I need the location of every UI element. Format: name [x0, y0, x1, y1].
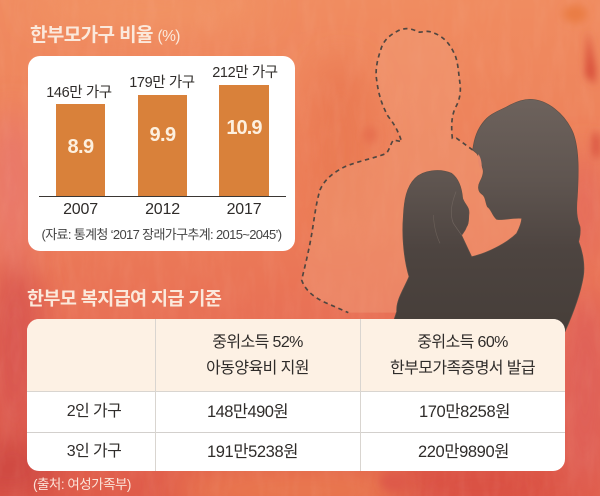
- table source: (출처: 여성가족부): [33, 477, 131, 492]
- row divider 1: [27, 391, 565, 392]
- mother and child silhouette: [390, 99, 584, 332]
- header: 52%: 아동양육비 지원: [206, 360, 309, 377]
- value: 10.9: 10.9: [226, 117, 262, 139]
- chart source: (자료: 통계청 ‘2017 장래가구추계: 2015~2045’): [42, 227, 281, 242]
- header: 60%: 한부모가족증명서 발급: [390, 360, 535, 377]
- year: 2007: 2007: [63, 201, 98, 218]
- row label: 3 persons: 3인 가구: [67, 443, 121, 460]
- axis line: [39, 196, 286, 197]
- row label: 2 persons: 2인 가구: [67, 403, 121, 420]
- value: 2 persons 52%: 148만490원: [207, 403, 288, 421]
- column divider 1: [155, 319, 156, 471]
- outline of absent parent: [302, 29, 584, 332]
- value: 2 persons 60%: 170만8258원: [419, 403, 510, 421]
- bar: 2012: [138, 95, 187, 196]
- value: 3 persons 52%: 191만5238원: [207, 443, 298, 461]
- value: 9.9: 9.9: [149, 124, 176, 146]
- title: single-parent household ratio: 한부모가구 비율 (%): [30, 25, 180, 46]
- value: 3 persons 60%: 220만9890원: [418, 443, 509, 461]
- header: 52%: [206, 334, 309, 377]
- header: 52%: 중위소득 52%: [212, 334, 303, 351]
- label: 2012 households: 179만 가구: [129, 75, 195, 91]
- year: 2017: 2017: [227, 201, 261, 218]
- header: 60%: 중위소득 60%: [417, 334, 508, 351]
- label: 2007 households: 146만 가구: [46, 85, 112, 101]
- panel: bar chart: [28, 56, 295, 251]
- header: 60%: [390, 334, 535, 377]
- year: 2012: 2012: [145, 201, 180, 218]
- heading: welfare benefit criteria: 한부모 복지급여 지급 기준: [27, 288, 221, 309]
- column divider 2: [360, 319, 361, 471]
- label: 2017 households: 212만 가구: [212, 65, 278, 81]
- row divider 2: [27, 432, 565, 433]
- bar: 2007: [56, 104, 105, 196]
- value: 8.9: 8.9: [67, 136, 94, 158]
- bar: 2017: [219, 85, 269, 196]
- table header background: [27, 319, 565, 391]
- table: benefit criteria: [27, 319, 565, 471]
